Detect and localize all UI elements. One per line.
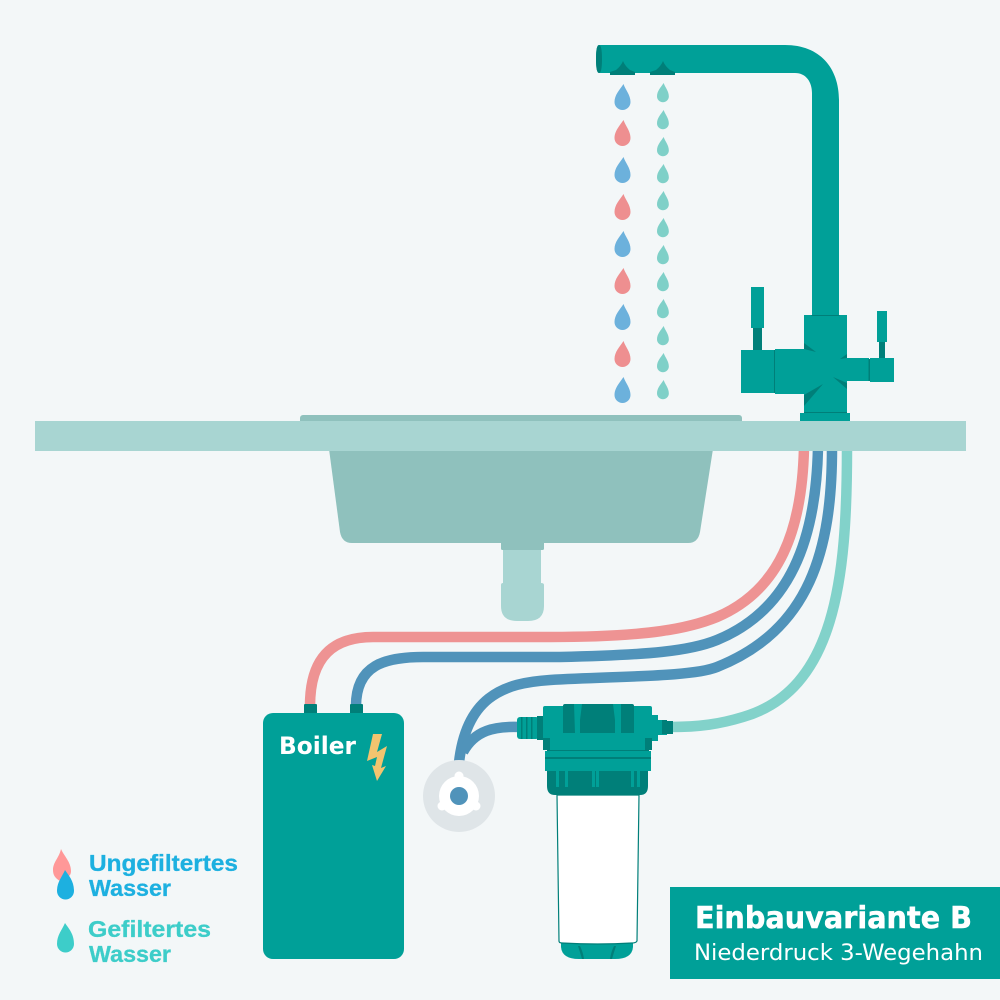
legend xyxy=(53,849,238,967)
flange xyxy=(800,413,850,421)
faucet body xyxy=(775,315,869,413)
sink rim xyxy=(300,415,742,427)
legend filtered text: Wasser xyxy=(89,941,171,967)
legend filtered text xyxy=(88,916,211,967)
spout end xyxy=(596,45,602,73)
valve center xyxy=(450,787,468,805)
left knob xyxy=(741,287,774,393)
valve plate xyxy=(423,760,495,832)
pipe: blue branch to filter xyxy=(463,727,520,752)
drain flange xyxy=(501,540,544,550)
body shadows xyxy=(804,315,847,414)
legend unfiltered text: Wasser xyxy=(89,875,171,901)
icon: lightning bolt xyxy=(367,734,387,781)
legend filtered text: Gefiltertes xyxy=(88,916,211,942)
nozzle left xyxy=(610,61,635,75)
pipe: blue from boiler xyxy=(356,448,818,706)
drops: mixed column xyxy=(614,84,630,403)
counter top xyxy=(35,421,966,451)
legend unfiltered text xyxy=(89,850,238,901)
nozzle right xyxy=(650,61,675,75)
filter outlet fitting xyxy=(652,715,673,741)
filter collar xyxy=(545,750,651,771)
legend unfiltered drops xyxy=(53,849,74,899)
legend unfiltered text: Ungefiltertes xyxy=(89,850,238,876)
boiler label: Boiler xyxy=(279,732,356,760)
pipe: red hot water to boiler xyxy=(310,448,804,706)
pipe: blue cold water to valve xyxy=(458,448,832,775)
pipe: teal filtered water xyxy=(670,448,847,727)
drops: filtered column xyxy=(657,83,669,399)
valve handle xyxy=(438,772,480,816)
filter head xyxy=(543,706,652,750)
filter inlet fitting xyxy=(517,716,543,740)
subheading: Niederdruck 3-Wegehahn xyxy=(694,941,983,966)
filter cap xyxy=(547,771,648,795)
heading: Einbauvariante B xyxy=(695,901,972,936)
filter bottom cap xyxy=(561,942,633,959)
faucet xyxy=(596,45,894,421)
drain trap xyxy=(501,583,544,621)
angle valve xyxy=(423,760,495,832)
sink xyxy=(300,415,742,621)
spout xyxy=(596,45,839,320)
boiler tank xyxy=(263,713,404,959)
boiler connectors xyxy=(304,704,317,714)
pipes xyxy=(310,448,847,775)
filter bowl xyxy=(557,795,639,944)
title box xyxy=(670,887,1000,979)
right knob xyxy=(868,311,894,382)
sink basin xyxy=(329,449,713,543)
boiler xyxy=(263,704,404,959)
head recess xyxy=(563,704,634,733)
filter xyxy=(517,704,673,959)
drain pipe xyxy=(503,550,541,586)
legend filtered drop xyxy=(57,923,74,952)
